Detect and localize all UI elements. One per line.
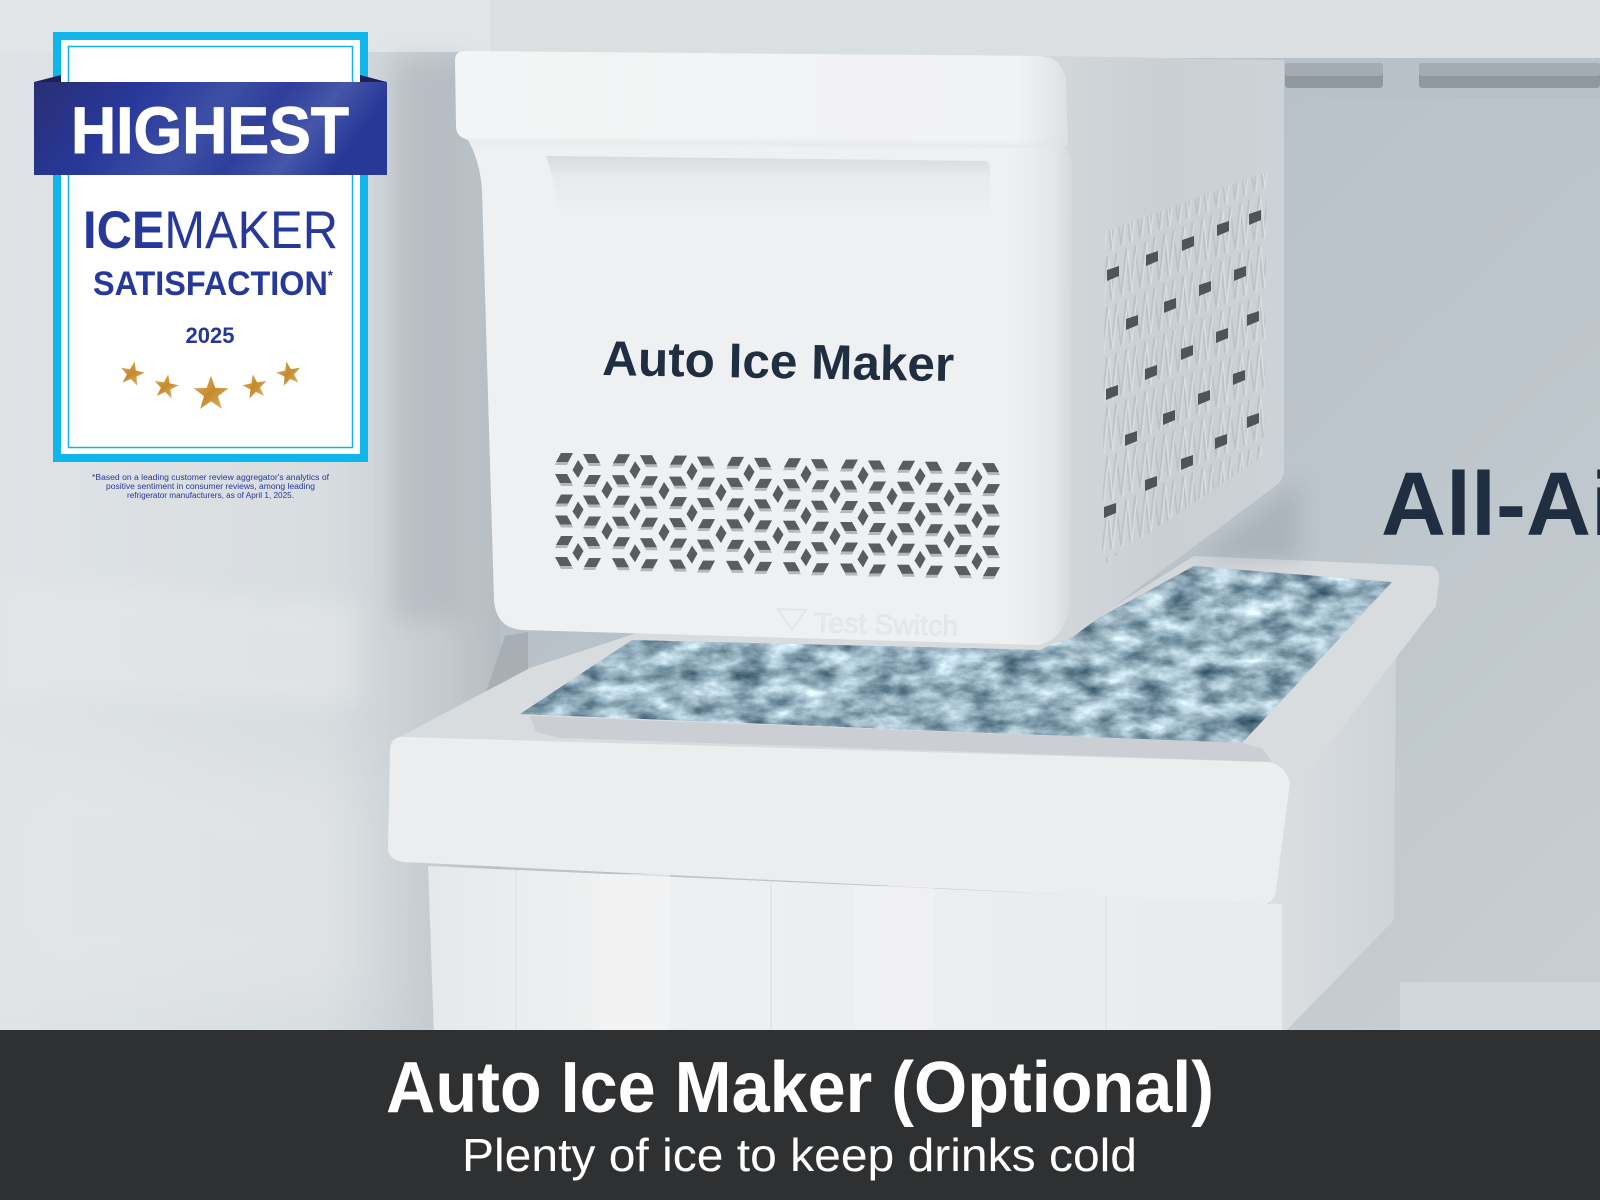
footnote: positive sentiment in consumer reviews, among leading	[106, 482, 315, 491]
unit front panel	[466, 136, 1072, 645]
handle recess	[546, 156, 990, 218]
unit side panel	[1040, 56, 1284, 645]
award badge	[34, 32, 387, 500]
badge frame	[53, 32, 368, 462]
unit label: Auto Ice Maker	[602, 332, 955, 392]
side panel vents	[1104, 210, 1261, 518]
front vent grid	[555, 453, 1000, 579]
satisfaction heading: SATISFACTION	[93, 265, 340, 303]
caption subtitle: Plenty of ice to keep drinks cold	[462, 1129, 1137, 1181]
footnote: *Based on a leading customer review aggregator's analytics of	[92, 473, 330, 482]
lid	[455, 51, 1068, 146]
auto ice maker unit	[455, 51, 1300, 650]
ice bin	[388, 556, 1439, 1035]
satisfaction heading: *	[328, 267, 334, 283]
caption bar	[0, 1030, 1600, 1200]
bin rim	[390, 556, 1439, 790]
ribbon heading: HIGHEST	[71, 93, 349, 167]
bin front band	[388, 737, 1290, 904]
star rating	[118, 359, 303, 409]
shelf slots	[1285, 63, 1600, 88]
ribbon fold right	[360, 75, 387, 82]
year: 2025	[186, 323, 234, 348]
side panel zigzag texture	[1102, 172, 1267, 565]
ribbon fold left	[34, 75, 61, 82]
ice	[510, 560, 1400, 750]
unit shadow	[1060, 480, 1300, 650]
footnote	[92, 473, 330, 500]
bin lower body	[428, 866, 1282, 1035]
ribbon	[34, 82, 387, 175]
caption title: Auto Ice Maker (Optional)	[386, 1048, 1214, 1128]
footnote: refrigerator manufacturers, as of April 1, 2025.	[127, 491, 294, 500]
ice maker heading: ICEMAKER	[83, 201, 338, 260]
embossed test switch: Test Switch	[814, 607, 959, 642]
